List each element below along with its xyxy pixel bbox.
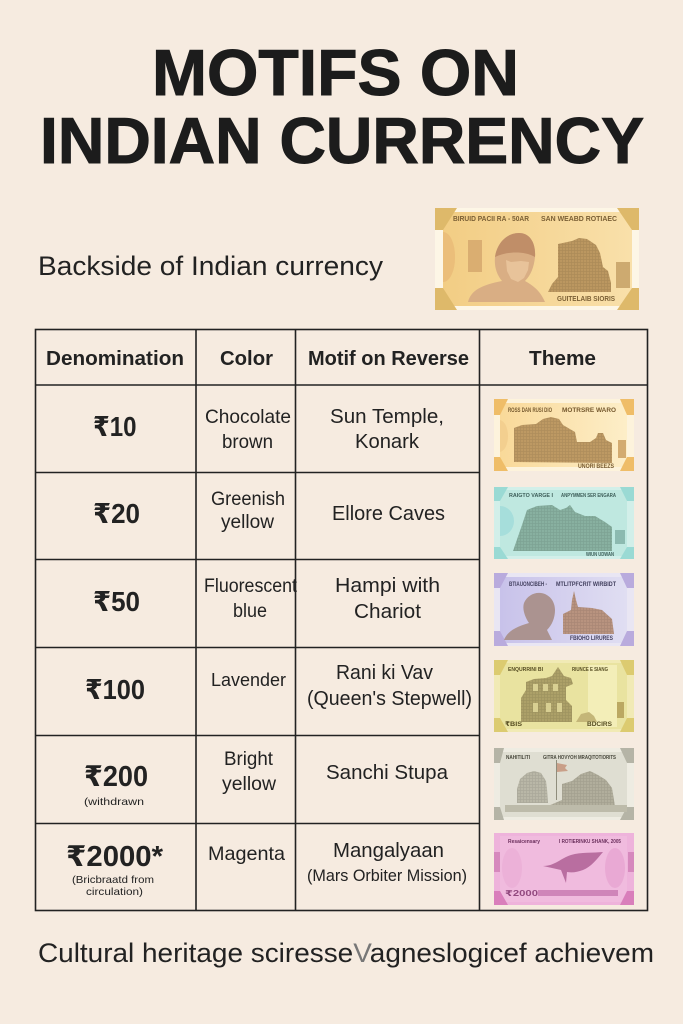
theme note: 10 rupee Sun Temple: MOTRSRE WARO [562, 408, 616, 414]
theme note: 200 rupee Sanchi Stupa: GITRA HOVYOH MRAQITOTIORITS [543, 755, 616, 761]
row: 2000 rupees: (Mars Orbiter Mission) [307, 866, 467, 885]
theme note: 50 rupee Hampi [494, 573, 634, 646]
row: 50 rupees: ₹50 [93, 586, 140, 617]
row: 50 rupees: Hampi with [335, 574, 440, 597]
table grid [36, 330, 648, 910]
row: 200 rupees: Sanchi Stupa [326, 761, 449, 784]
theme note: 200 rupee Sanchi Stupa [494, 748, 634, 820]
theme note: 50 rupee Hampi: FBIOHO LIRURES [570, 636, 613, 642]
theme note: 2000 rupee Mangalyaan: ₹2000 [505, 889, 539, 898]
row: 100 rupees: Lavender [211, 669, 286, 690]
header row: Denomination [46, 347, 184, 370]
theme note: 20 rupee Ellore Caves: ANPYMMEN SER ENGARA [561, 493, 616, 499]
row: 100 rupees [85, 661, 472, 710]
portrait [468, 233, 545, 302]
row: 2000 rupees: circulation) [86, 886, 143, 898]
row: 200 rupees: ₹200 [84, 761, 148, 793]
row: 200 rupees: yellow [222, 773, 277, 795]
row: 50 rupees: Fluorescent [204, 575, 298, 597]
theme note: 100 rupee Rani ki Vav [494, 660, 634, 732]
theme note: 100 rupee Rani ki Vav: BDCIRS [587, 722, 612, 728]
row: 50 rupees [93, 574, 440, 623]
theme note: 20 rupee Ellore Caves: RAIGTO VARGE I [509, 493, 553, 499]
theme note: 200 rupee Sanchi Stupa: NAHITILITI [506, 755, 530, 761]
row: 20 rupees: ₹20 [93, 498, 140, 529]
header row: Theme [529, 347, 596, 370]
row: 20 rupees: Ellore Caves [332, 502, 445, 525]
footer caption: Cultural heritage scire sseVagneslogicef achievem [38, 938, 654, 968]
row: 2000 rupees: ₹2000* [66, 841, 164, 873]
banknote: Gandhi portrait sample: BIRUID PACII RA - 50AR [453, 214, 530, 223]
row: 2000 rupees [66, 839, 467, 898]
row: 50 rupees: blue [233, 600, 267, 622]
title [40, 36, 644, 177]
row: 200 rupees: (withdrawn [84, 796, 144, 808]
row: 10 rupees: Chocolate [205, 406, 291, 428]
table [36, 330, 648, 910]
row: 50 rupees: Chariot [354, 600, 421, 623]
title: INDIAN CURRENCY [40, 104, 644, 177]
banknote: Gandhi portrait sample: GUITELAIB SIORIS [557, 296, 615, 303]
theme note: 2000 rupee Mangalyaan: Resaicensary [508, 839, 541, 845]
theme note: 100 rupee Rani ki Vav: RIUNCE E SIANG [572, 667, 608, 673]
header row: Motif on Reverse [308, 347, 469, 370]
row: 2000 rupees: Mangalyaan [333, 839, 444, 862]
theme note: 2000 rupee Mangalyaan [494, 833, 634, 905]
monument [548, 238, 611, 292]
row: 10 rupees: brown [222, 431, 273, 453]
theme note: 10 rupee Sun Temple [494, 399, 634, 471]
banknote: Gandhi portrait sample: SAN WEABD ROTIAEC [541, 214, 618, 223]
title: MOTIFS ON [152, 36, 519, 109]
row: 10 rupees [93, 405, 444, 453]
banknote: Gandhi portrait sample [435, 208, 639, 310]
row: 20 rupees: Greenish [211, 488, 285, 510]
subtitle: backside of Indian currency: Backside of Indian currency [38, 251, 384, 281]
row: 20 rupees [93, 488, 445, 533]
row: 10 rupees: Sun Temple, [330, 405, 444, 428]
row: 10 rupees: ₹10 [93, 411, 136, 442]
row: 200 rupees: Bright [224, 748, 274, 770]
row: 100 rupees: Rani ki Vav [336, 661, 434, 684]
row: 100 rupees: (Queen's Stepwell) [307, 687, 472, 710]
theme note: 20 rupee Ellore Caves [494, 487, 634, 559]
row: 20 rupees: yellow [221, 511, 275, 533]
row: 200 rupees [84, 748, 449, 808]
theme note: 50 rupee Hampi: MTLITPFCRIT WIRBIDT [556, 582, 616, 588]
theme note: 2000 rupee Mangalyaan: I ROTIERINKU SHANK, 2005 [559, 839, 621, 845]
row: 2000 rupees: Magenta [208, 843, 285, 865]
theme note: 10 rupee Sun Temple: ROSS DAN RUSI DIO [508, 408, 552, 414]
theme note: 10 rupee Sun Temple: UNORI BEEZS [578, 464, 614, 470]
theme note: 100 rupee Rani ki Vav: ENQURRINI BI [508, 667, 543, 673]
row: 10 rupees: Konark [355, 430, 420, 453]
theme note: 20 rupee Ellore Caves: WIUN UDWAN [586, 552, 614, 558]
theme note: 100 rupee Rani ki Vav: ₹BIS [505, 721, 523, 728]
header row [46, 347, 596, 370]
row: 100 rupees: ₹100 [85, 674, 145, 705]
theme note: 50 rupee Hampi: BTIAUONCIBEH - [509, 582, 547, 588]
row: 2000 rupees: (Bricbraatd from [72, 874, 154, 886]
header row: Color [220, 347, 273, 370]
